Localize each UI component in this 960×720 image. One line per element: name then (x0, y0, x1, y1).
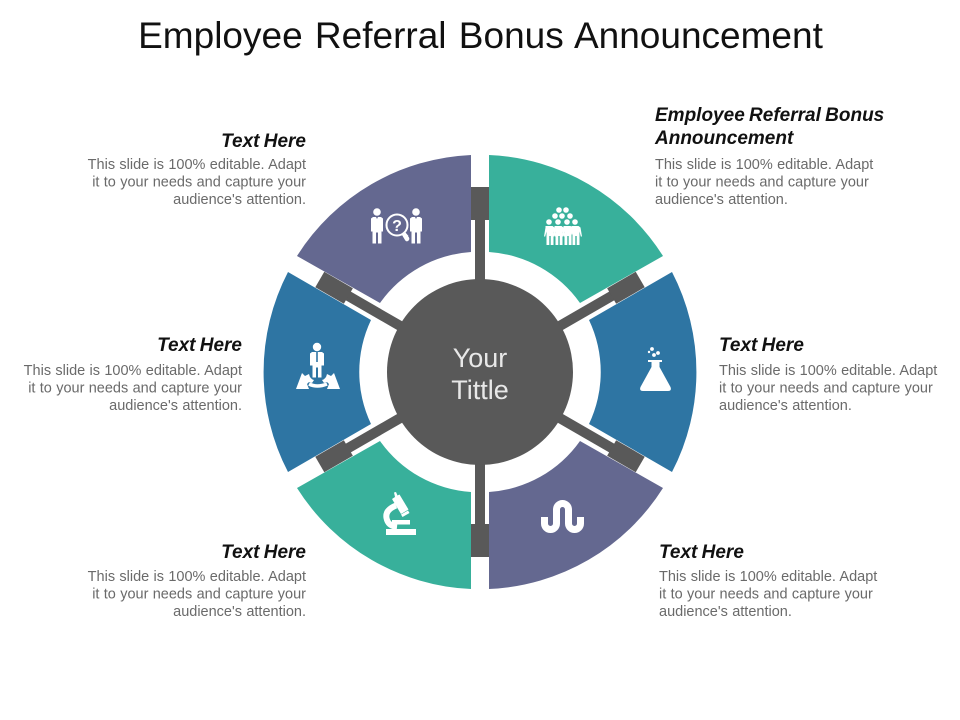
text block: left (24, 335, 242, 414)
heading: Employee Referral Bonus (655, 105, 884, 126)
panel: bottom left segment (297, 441, 471, 589)
body: This slide is 100% editable. Adapt (659, 569, 877, 585)
heading: Text Here (659, 542, 744, 563)
title: Employee Referral Bonus Announcement (138, 15, 824, 56)
body: audience's attention. (659, 604, 792, 620)
body: it to your needs and capture your (28, 380, 242, 396)
panel: left segment (264, 272, 371, 472)
body: audience's attention. (173, 192, 306, 208)
text block: top left (88, 131, 306, 208)
icon: microscope (386, 492, 416, 535)
heading: Text Here (221, 542, 306, 563)
text block: top right (654, 105, 884, 208)
body: audience's attention. (655, 192, 788, 208)
panel: right segment (589, 272, 696, 472)
heading: Announcement (654, 128, 794, 149)
center label: Tittle (451, 375, 509, 405)
panel: top right segment (489, 155, 663, 303)
center label: Your (453, 343, 507, 373)
heading: Text Here (221, 131, 306, 152)
diagram: connectors (315, 187, 645, 557)
panel: top left segment (297, 155, 471, 303)
body: it to your needs and capture your (659, 586, 873, 602)
panel: bottom right segment (489, 441, 663, 589)
text block: bottom left (88, 542, 306, 620)
heading: Text Here (719, 335, 804, 356)
body: audience's attention. (719, 398, 852, 414)
icon: person with arrows (296, 343, 340, 389)
body: it to your needs and capture your (719, 380, 933, 396)
icon: stumbleupon logo (544, 504, 580, 530)
body: it to your needs and capture your (92, 586, 306, 602)
body: This slide is 100% editable. Adapt (88, 157, 306, 173)
body: This slide is 100% editable. Adapt (88, 569, 306, 585)
body: it to your needs and capture your (92, 174, 306, 190)
body: audience's attention. (173, 604, 306, 620)
body: This slide is 100% editable. Adapt (655, 157, 873, 173)
heading: Text Here (157, 335, 242, 356)
body: audience's attention. (109, 398, 242, 414)
center circle (387, 279, 573, 465)
icon: flask with bubbles (640, 347, 671, 391)
body: This slide is 100% editable. Adapt (719, 363, 937, 379)
body: This slide is 100% editable. Adapt (24, 363, 242, 379)
body: it to your needs and capture your (655, 174, 869, 190)
icon: people with question magnifier (371, 208, 422, 244)
icon: crowd of people (544, 207, 582, 245)
text block: bottom right (659, 542, 877, 620)
text block: right (719, 335, 937, 414)
icon: people with question magnifier: ? (392, 218, 402, 235)
